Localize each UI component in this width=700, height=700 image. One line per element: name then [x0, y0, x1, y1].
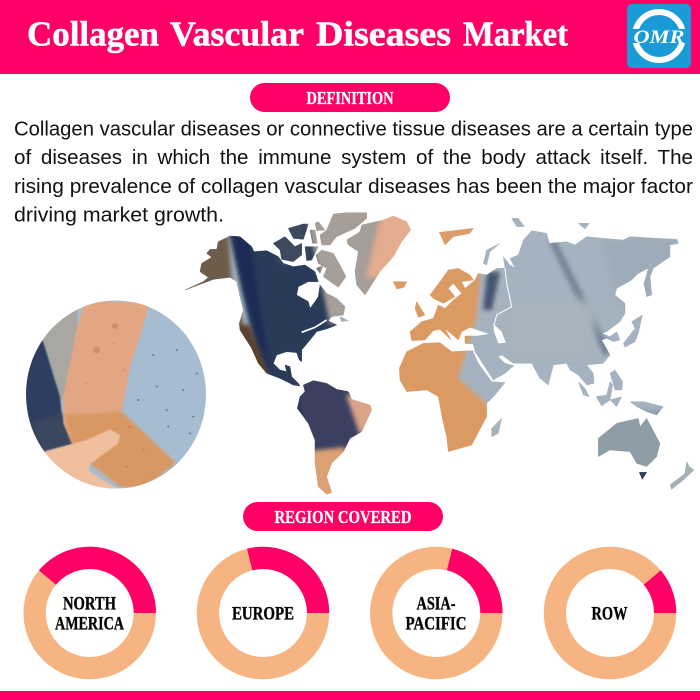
donut: Rest of World — [555, 558, 676, 668]
map texture: arctic dark — [274, 224, 310, 265]
donut: Asia-Pacific: PACIFIC — [406, 614, 466, 634]
donut: Europe: EUROPE — [232, 604, 294, 624]
map texture: navy stripe — [232, 232, 270, 372]
photo dark chair — [26, 340, 72, 453]
map texture: Europe Africa orange — [393, 228, 494, 452]
region covered heading pill — [243, 502, 443, 531]
photo gown — [20, 300, 210, 490]
donut: Asia-Pacific: ASIA- — [416, 594, 456, 614]
definition text block: of diseases in which the immune system of the body attack itself. The — [14, 146, 693, 169]
definition text block: rising prevalence of collagen vascular diseases has been the major factor — [14, 175, 693, 198]
region covered heading pill: REGION COVERED — [274, 507, 412, 527]
map texture: brown left strip — [185, 236, 269, 374]
title: Vascular — [170, 14, 304, 54]
definition text block — [14, 118, 693, 227]
donut: North America — [35, 547, 156, 668]
donut: Asia-Pacific — [381, 549, 503, 668]
definition text block: Collagen vascular diseases or connective tissue diseases are a certain type — [14, 118, 693, 140]
map texture: Asia folds — [548, 240, 612, 356]
icon: OMR logo — [627, 4, 691, 68]
world map filled with photo texture — [175, 200, 700, 500]
donut: North America: AMERICA — [55, 614, 124, 634]
map texture: Greenland peach — [364, 216, 411, 280]
photo grey wall — [42, 310, 78, 400]
map texture: navy Americas — [228, 224, 342, 421]
photo upper arm — [63, 300, 149, 443]
photo skin freckles — [86, 323, 145, 468]
donut: North America: NORTH — [63, 594, 116, 614]
footer band — [0, 691, 700, 700]
map texture: arctic grey — [304, 212, 381, 326]
donut: Europe — [208, 547, 329, 668]
title — [27, 14, 568, 54]
map texture: South America — [296, 380, 359, 450]
photo hand — [44, 429, 120, 488]
definition heading pill — [250, 83, 450, 112]
definition text block: driving market growth. — [14, 204, 224, 227]
title: Market — [463, 14, 568, 54]
map white seams: borders and inland seas — [302, 268, 512, 343]
circular photo: arm with skin rash — [20, 300, 210, 493]
map texture: Australia — [598, 409, 662, 467]
photo forearm — [65, 412, 176, 490]
icon: OMR logo: OMR — [634, 27, 684, 48]
donut: Rest of World: ROW — [592, 604, 628, 624]
title: Diseases — [316, 14, 451, 54]
photo gown spots — [137, 349, 198, 434]
definition heading pill: DEFINITION — [306, 88, 394, 108]
header band — [0, 0, 700, 74]
title: Collagen — [27, 14, 159, 54]
